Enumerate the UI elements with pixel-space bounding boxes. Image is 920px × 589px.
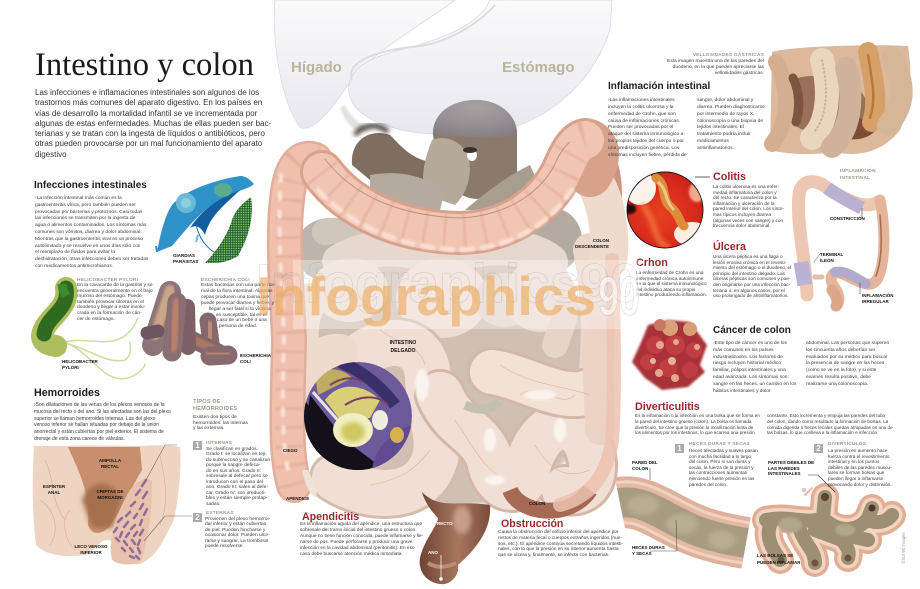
text: helicobacter [77,282,153,322]
label: las bolsas: PUEDEN INFLAMAR [757,560,800,565]
text: cancer column 2: abdominal. Las personas que superen [806,341,889,346]
text: tipos: hemorroides: las internas [193,420,248,426]
hemorrhoid labels: INFERIOR [80,550,102,555]
text: infecciones intestinales: comunes son vómitos, diarrea y dolor abdominal. [35,230,142,235]
text: hemorroides [34,402,171,442]
text: apendicitis: caso debe buscarse atención médica inmediata. [300,552,403,557]
diverticula: pouches [766,475,892,566]
text: obstruccion [498,530,623,558]
giardia parasite [156,176,254,256]
text: helicobacter: mucoso del estómago. Puede [77,294,142,299]
heading: tipos de hemorroides [193,399,237,412]
text: obstruccion: sos, etc.). El apéndice continúa secretando líquidos intesti- [498,542,623,547]
label: helicobacter pylori: HELICOBACTER [62,359,98,364]
label: pared del colon: PARED DEL [632,460,658,465]
text: obstruccion: nales, con lo que la presión en su interior aumenta hasta [498,547,619,552]
heading: inflamacion intestinal: Inflamación intestinal [608,81,710,92]
text: crhon: del individuo ataca su propio [636,287,695,292]
text: infecciones intestinales: las infecciones se transmiten por la ingesta de [35,216,135,221]
label: intestino delgado: INTESTINO [390,340,416,346]
label: inflamacion irregular: INFLAMACIÓN [862,293,894,298]
text: cancer column 1: edad avanzada. Los síntomas son: [713,375,789,380]
text: cancer column 2: examen resulta positivo, debe [806,375,871,380]
text: escherichia coli: cepas producen una toxina que [201,295,269,300]
text: infecciones intestinales: ›La infección intestinal más común es la [35,196,122,201]
heading: ulcera: Úlcera [713,241,746,253]
text: ulcera [713,254,791,298]
diverticula: hard stool [620,468,746,551]
text: escherichia coli: Estas bacterias son una parte nor- [201,283,276,288]
label: escherichia coli [240,353,271,364]
heading: tipos de hemorroides: HEMORROIDES [193,406,237,412]
text: diverticulitis column 2: del colon, dando como resultado la formación de bolsas. La [767,419,888,424]
text: tipos: Existen dos tipos de [193,415,237,420]
text: apendicitis: infección en la cavidad abdominal (peritonitis). En ese [300,546,415,551]
text: apendicitis [300,522,423,557]
heading: cancer de colon: Cáncer de colon [713,325,791,336]
text: vellosidades: Esta imagen muestra una de las paredes del [667,59,764,64]
text: inflamacion column 1: Pueden ser provocadas por el [608,125,673,130]
text: cancer column 1: hábitos intestinales y dolor [713,389,771,394]
text: escherichia coli: puede provocar diarrea y fiebre, y [201,301,274,306]
text: obstruccion: restos de materia fecal o cuerpos extraños ingeridos (hue- [498,536,622,541]
step 1: heces duras: del colon. Pero si son duras y [689,459,750,464]
text: inflamacion column 1: una predisposición genética. Los [608,146,679,151]
hemorrhoid labels: ANAL [48,490,60,495]
step 1: heces duras: Heces afectadas y suaves pasan [689,448,758,453]
text: vellosidades: vellosidades gástricas. [715,71,764,76]
step 2: externas: 2 [195,513,200,522]
heading: escherichia coli: ESCHERICHIA COLI [201,278,250,283]
heading: crhon: Crhon [636,257,668,269]
text: cancer column 2: la presencia de sangre en las heces [806,361,884,366]
text: cancer column 1: industrializados. Los factores de [713,355,783,360]
step 1: internas: porque la sangre defeca- [206,463,260,468]
hemorrhoid labels: ESFÍNTER [43,484,65,489]
heading: apendicitis: Apendicitis [302,511,359,523]
text: cancer column 1: ›Este tipo de cáncer es uno de los [713,341,787,346]
heading: tipos de hemorroides: TIPOS DE [193,399,221,405]
text: colitis [713,184,784,228]
step 1: internas [193,441,270,507]
watermark: Infographics [256,265,596,327]
step 1: internas: car. Grado IV: son irreducti- [206,491,266,496]
text: diverticulitis column 1 [635,413,760,435]
text: hemorroides: mucosa del recto o del ano. Si las afectadas son las del plexo [34,409,171,415]
organ label: higado: Hígado [291,59,342,76]
text: inflamacion column 1: incluyen la colitis ulcerosa y la [608,105,674,110]
intro text: Las infecciones e inflamaciones intestinales son algunos de los [35,88,259,97]
text: inflamacion column 2: medicamentos [697,139,729,144]
label: ano: ANO [428,550,438,555]
step 2: externas: Provienen del plexo hemorroi- [205,517,270,522]
hemorrhoid anatomy [33,445,192,564]
text: apendicitis: sobresale del tramo inicial del intestino grueso o colon. [300,528,417,533]
text: colitis: medad inflamatoria del colon y [713,190,777,195]
colon [279,140,614,505]
credit: ©Sol 90 Images [901,532,906,564]
text: ulcera: lesión erosiva crónica en el revesti- [713,260,786,265]
text: inflamacion column 1: ›Las inflamaciones intestinales [608,98,675,103]
label: colon descendente: DESCENDENTE [575,244,609,249]
text: vellosidades: duodeno, en la que pueden apreciarse las [673,65,764,70]
organ label: estomago: Estómago [502,59,575,76]
colon diagram [798,182,884,306]
text: crhon: La enfermedad de Crohn es una [636,270,704,275]
text: helicobacter: cer de estómago. [77,317,115,322]
intro text: vías de desarrollo la mortalidad infantil se ve incrementada por [35,109,257,118]
step 2: diverticulos: La presión en aumento hace [828,448,887,453]
label: helicobacter pylori [62,359,98,370]
text: colitis: mas típicos incluyen diarrea [713,212,771,217]
heading: helicobacter: HELICOBACTER PYLORI [77,278,138,283]
text: escherichia coli: caso de un bebé o una [217,318,267,323]
label: las bolsas: LAS BOLSAS SE [757,553,793,558]
label: inflamacion irregular [862,292,894,304]
liver ghost [274,0,455,128]
label: escherichia coli: COLI [240,359,251,364]
text: inflamacion column 2: tejidos intestinales. El [697,125,744,130]
intro text: trastornos más comunes del aparato digestivo. En los países en [35,98,262,107]
step 1: heces duras: ejerciendo fuerte presión en las [689,476,754,481]
label: terminal ileon: TERMINAL [820,252,843,257]
hemorrhoid labels: LECO VENOSO [74,544,108,549]
text: diverticulitis column 2: las bolsas, lo que conlleva a la inflamación e infección. [767,430,878,435]
label: partes debiles: INTESTINALES [768,471,801,476]
text: cancer column 2: evaluados por su médico para buscar [806,355,888,360]
text: ulcera: Una úlcera péptica es una llaga o [713,254,783,259]
text: hemorroides: venoso inferior se hallan situadas por debajo de la unión [34,422,159,428]
text: obstruccion: Causa la obstrucción del orificio inferior del apéndice por [498,530,619,535]
text: tipos [193,414,248,431]
heading: inflamacion diagram: INFLAMACIÓN [840,169,876,174]
step 1: internas: sadas. [206,502,220,507]
step 2: diverticulos: DIVERTÍCULOS [828,442,866,447]
intro text: digestivo [35,150,67,159]
label: heces duras y secas: HECES DURAS [632,545,665,550]
text: cancer column 1: riesgo incluyen historial médico [713,361,781,366]
label: partes debiles [768,460,814,476]
heading: vellosidades: VELLOSIDADES GÁSTRICAS [693,53,764,58]
text: escherichia coli: mal de la flora intestinal. Algunas [201,289,272,294]
text: colitis: inflamación y ulceración de la [713,201,774,206]
text: infecciones intestinales: gastroenteritis vírica, pero también pueden ser [35,203,136,208]
villi photo [770,45,910,154]
label: pared del colon [632,460,658,471]
text: cancer column 2: (como se ve en la foto), y si este [806,368,876,373]
text: inflamacion column 1: ataque del sistema inmunológico a [608,132,683,137]
intro text: algunas de estas enfermedades. Muchas de ellas pueden ser bac- [35,119,271,128]
text: ulcera: den originarse por una infección bac- [713,282,790,287]
label: constriccion: CONSTRICCIÓN [830,216,865,221]
text: ulcera: uso prolongado de antiinflamatorios. [713,293,789,298]
label: terminal ileon: ÍLEON [820,258,834,263]
text: apendicitis: narse de pus. Puede perforarse y producir una grave [300,540,413,545]
small intestine [295,208,602,507]
text: helicobacter: En la cavacarde de la gastritis y se [77,283,153,288]
text: hemorroides: anorrectal y están cubiertas por piel exterior. El sistema de [34,429,164,435]
label: inflamacion irregular: IRREGULAR [862,299,889,304]
intro text: terianas y se tratan con la ingesta de líquidos o antibióticos, pero [35,129,265,138]
text: inflamacion column 2: antiinflamatorios. [697,146,734,151]
step 1: internas: introducen con el paso del [206,480,263,485]
text: inflamacion column 2 [697,98,765,151]
text: escherichia coli: llegar a ser fatal si la víctima [209,307,271,312]
step 2: externas: EXTERNAS [206,511,234,516]
text: infecciones intestinales: deshidratación, otras infecciones deben ser tratadas [35,257,148,262]
text: inflamacion column 1: causa de inflamaciones crónicas. [608,119,680,124]
text: ulcera: principio del intestino delgado. Las [713,271,785,276]
text: hemorroides: superior se llaman hemorroides internas. Las del plexo [34,416,155,422]
text: escherichia coli: persona de edad. [219,324,257,329]
text: obstruccion: que se ulcera y, finalmente, se infecta con bacterias. [498,553,609,558]
label: colon: COLON [529,501,545,506]
appendix [302,470,317,497]
step 2: externas: ocasionar dolor. Pueden ulce- [205,533,270,538]
step 2: diverticulos: provocando dolor y distensión. [828,482,892,487]
text: cancer column 1: más comunes en los países [713,348,774,353]
text: crhon [636,270,707,297]
hemorrhoid labels: MORGAGNI [97,495,123,500]
text: colitis: frecuencia dolor abdominal. [713,223,771,228]
text: apendicitis: Es la inflamación aguda del apéndice, una estructura que [300,522,422,527]
step 2: externas: puede resolverse. [205,544,244,549]
label: partes debiles: PARTES DÉBILES DE [768,460,814,465]
text: helicobacter: también provocar úlceras en el [77,300,144,305]
label: helicobacter pylori: PYLORI [62,365,79,370]
step 1: heces duras: HECES DURAS Y SECAS [689,442,750,447]
text: inflamacion column 1: síntomas incluyen fiebre, pérdida de [608,153,687,158]
text: ulcera: miento del estómago o el duodeno, el [713,265,791,270]
text: hemorroides: ›Son dilataciones de las venas de los plexos venosos de la [34,402,165,408]
step 2: diverticulos: 2 [816,444,821,453]
heading: colitis: Colitis [713,171,746,183]
label: giardias: GIARDIAS [173,253,195,258]
step 2: externas: dal inferior y están cubiertas [205,522,266,527]
text: diverticulitis column 1: Es la inflamación o la infección en una bolsa que se forma en [635,413,760,418]
heading: inflamacion diagram: INTESTINAL [840,176,870,181]
text: cancer column 1: familiar, pólipos intestinales y una [713,368,786,373]
step 2: diverticulos: fuerza contra el revestimiento [828,454,890,459]
intro text: otras pueden provocarse por un mal funcionamiento del aparato [35,139,262,148]
text: inflamacion column 1: enfermedad de Crohn, que son [608,112,676,117]
text: crhon: en la que el sistema inmunológico [636,281,707,286]
text: colitis: La colitis ulcerosa es una enfer- [713,184,779,189]
heading: infecciones intestinales: Infecciones intestinales [34,180,147,191]
label: heces duras y secas [632,545,665,556]
step 1: internas: do en sus años. Grado II: [206,469,261,474]
text: crhon: intestino produciendo inflamación. [636,292,707,297]
text: infecciones intestinales: el reemplazo de fluidos para evitar la [35,250,115,255]
text: inflamacion column 2: colonoscopía o una biopsia de [697,119,763,124]
watermark: Infographics90 [256,252,640,314]
step 1: internas: do submucoso y se canalizan [206,458,270,463]
text: escherichia coli: es susceptible, tal es el [216,313,267,318]
step 1: heces duras: paredes del colon. [689,482,727,487]
step 2: diverticulos: pueden llegar a inflamarse [828,476,883,481]
text: diverticulitis column 2: comida digerida o heces fecales quedan atrapadas en una de [767,425,893,430]
text: helicobacter: crada en la formación de cán- [77,311,142,316]
label: heces duras y secas: Y SECAS [632,551,652,556]
text: helicobacter: duodeno y llegar a estar involu- [77,305,145,310]
text: colitis: (algunas veces con sangre) y con [713,218,783,223]
label: giardias: PARÁSITAS [173,259,198,264]
tumour [632,319,707,390]
step 1: heces duras: con mucha facilidad a lo largo [689,454,751,459]
hemorrhoid labels: AMPOLLA [99,458,121,463]
text: infecciones intestinales: provocadas por bacterias y protozoos. Casi todas [35,210,142,215]
text: colitis: del recto. Se caracteriza por la [713,195,777,200]
giardia: green leaf [205,197,252,263]
heading: obstruccion: Obstrucción [501,518,563,530]
label: giardias [173,253,198,264]
text: inflamacion column 2: por intermedio de rayos X, [697,112,754,117]
text: cancer column 1: sangre en las heces, un cambio en los [713,382,796,387]
title: Intestino y colon [35,47,254,83]
label: las bolsas [757,553,800,565]
text: infecciones intestinales: con medicamentos antimicrobianos. [35,264,113,269]
step 1: internas: 1 [195,441,200,450]
text: ulcera: teriana o, en algunos casos, por el [713,288,785,293]
step 2: diverticulos: intestinal y en los puntos [828,459,879,464]
label: apendice: APÉNDICE [286,496,309,501]
text: inflamacion column 2: sangre, dolor abdominal y [697,98,753,103]
hemorrhoid labels: RECTAL [101,464,119,469]
step 1: internas: ano. Grado III: salen al defe- [206,485,268,490]
text: diverticulitis column 1: los alimentos por los intestinos, lo que acarrea una presión [635,430,755,435]
text: colitis: pared interior del colon. Los sínto- [713,206,784,211]
text: infecciones intestinales [35,196,148,269]
step 1: internas: bles y están siempre prolap- [206,496,267,501]
text: inflamacion column 1 [608,98,687,158]
hemorrhoid labels: CRIPTAS DE [97,489,123,494]
text: infecciones intestinales: autolimitado y se resuelve en unos días sólo con [35,244,140,249]
text: cancer column 2: realizarse una colonoscopía. [806,382,868,387]
step 2: diverticulos [814,440,892,487]
step 1: heces duras [675,442,758,487]
step 1: internas: Se clasifican en grados. [206,447,258,452]
step 2: externas: rarse y sangrar. La trombosis [205,539,268,544]
label: colon descendente [575,238,609,249]
text: inflamacion column 2: tratamiento podría incluir [697,132,751,137]
step 2: externas [193,511,270,549]
text: infecciones intestinales: agua o alimentos contaminados. Los síntomas más [35,223,146,228]
label: pared del colon: COLON [632,466,648,471]
step 2: diverticulos: débiles de las paredes muscu- [828,465,892,470]
label: colon descendente: COLON [593,238,609,243]
heading: hemorroides: Hemorroides [34,387,100,399]
step 2: diverticulos: lares se forman bolsas que [828,470,884,475]
label: intestino delgado [390,340,416,354]
text: hemorroides: drenaje de esta zona carece de válvulas. [34,436,125,442]
text: escherichia coli [201,282,276,329]
step 1: internas: INTERNAS [206,441,232,446]
step 1: heces duras: 1 [677,444,682,453]
text: infecciones intestinales: Mientras que la gastroenteritis viral es un proceso [35,237,143,242]
hemorrhoid labels [43,458,124,555]
step 1: internas: Grado I: se localizan en teji- [206,452,267,457]
text: vellosidades [667,58,764,76]
heading: inflamacion diagram [840,168,876,181]
text: inflamacion column 2: diarrea. Pueden diagnosticarse [697,105,765,110]
text: inflamacion column 1: los propios tejidos del cuerpo o por [608,139,684,144]
text: cancer column 1 [713,340,796,394]
stomach ghost [349,0,612,134]
helicobacter pylori [42,284,145,379]
inset: intestinal villi [304,362,412,470]
label: intestino delgado: DELGADO [390,348,416,354]
text: diverticulitis column 2 [767,413,893,435]
duodenum and dark tubes [340,100,550,210]
step 1: heces duras: secas, la fuerza de la presión y [689,465,754,470]
label: recto: RECTO [437,521,453,526]
text: crhon: enfermedad crónica autoinmune [636,276,703,281]
label: terminal ileon [820,252,844,263]
text: cancer column 2: los cincuenta años deberían ser [806,348,875,353]
text: helicobacter: encuentra generalmente en el bajo [77,289,153,294]
text: ulcera: úlceras pépticas son comunes y pue- [713,276,790,281]
label: escherichia coli: ESCHERICHIA [240,353,271,358]
text: apendicitis: Aunque no tiene función conocida, puede inflamarse y lle- [300,534,423,539]
text: diverticulitis column 1: divertículo. Se cree que la presión la movilización lenta de [635,425,753,430]
step 1: heces duras: las contracciones aumentan [689,470,747,475]
label: partes debiles: LAS PAREDES [768,466,800,471]
escherichia coli [147,290,228,356]
text: diverticulitis column 1: la pared del intestino grueso (colon). La bolsa es llamada [635,419,751,424]
label: ciego: CIEGO [283,448,298,453]
text: tipos: y las externas. [193,426,225,431]
step 1: internas: sobresale al defecar pero se [206,474,268,479]
colitis photo [624,171,710,248]
intro text [35,88,271,159]
step 2: externas: de piel. Pueden hincharse y [205,528,265,533]
rectum [420,490,590,584]
text: cancer column 2 [806,340,889,387]
text: diverticulitis column 2: constante. Esto incrementa y empuja las paredes del tubo [767,413,885,418]
heading: diverticulitis: Diverticulitis [635,401,700,413]
